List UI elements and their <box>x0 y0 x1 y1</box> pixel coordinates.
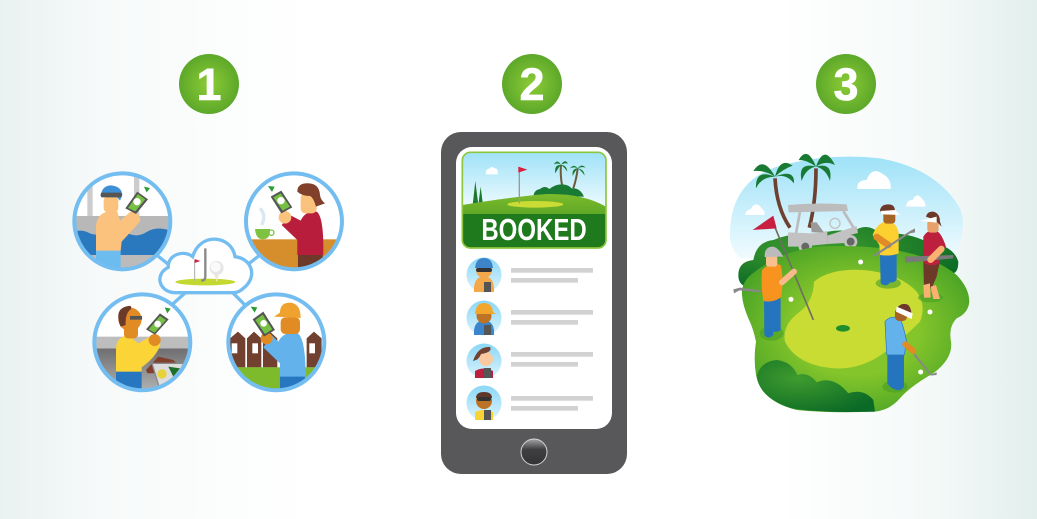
sky <box>730 157 963 258</box>
avatar row 1 <box>466 258 593 292</box>
badge 3 <box>816 54 876 114</box>
phone body <box>441 132 627 474</box>
golfer in blue <box>882 304 937 393</box>
phone screen <box>456 147 612 429</box>
booked banner: BOOKED <box>481 213 587 247</box>
avatar row 3 <box>466 344 593 378</box>
booked banner <box>462 152 606 251</box>
front bushes <box>757 360 875 412</box>
palm trees <box>753 154 835 228</box>
badge 2 <box>502 54 562 114</box>
fairway <box>742 246 969 412</box>
circle: man with shopping cart <box>94 294 190 393</box>
balls <box>788 259 932 374</box>
badge 1: 1 <box>196 59 222 110</box>
home button <box>521 439 547 465</box>
cloud <box>160 239 252 293</box>
avatar row 2 <box>466 300 593 336</box>
clouds <box>745 171 925 215</box>
badge 2: 2 <box>519 59 545 110</box>
golfer in red <box>905 212 953 302</box>
putting green <box>784 270 923 368</box>
circle: swimmer <box>70 173 177 272</box>
panel: step 3 golf course <box>730 154 969 412</box>
panel: step 1 connected golfers <box>70 173 343 393</box>
avatar row 4 <box>466 386 593 420</box>
golfer with flag <box>733 216 813 341</box>
golf cart <box>788 203 858 253</box>
connector lines <box>157 255 260 307</box>
hole <box>836 325 850 332</box>
golfer in yellow <box>873 204 915 289</box>
circle: man in garden <box>227 294 327 391</box>
badge 3: 3 <box>833 59 859 110</box>
panel: step 2 phone <box>441 132 627 474</box>
badge 1 <box>179 54 239 114</box>
back bushes <box>738 227 958 287</box>
circle: woman with coffee <box>246 173 343 273</box>
